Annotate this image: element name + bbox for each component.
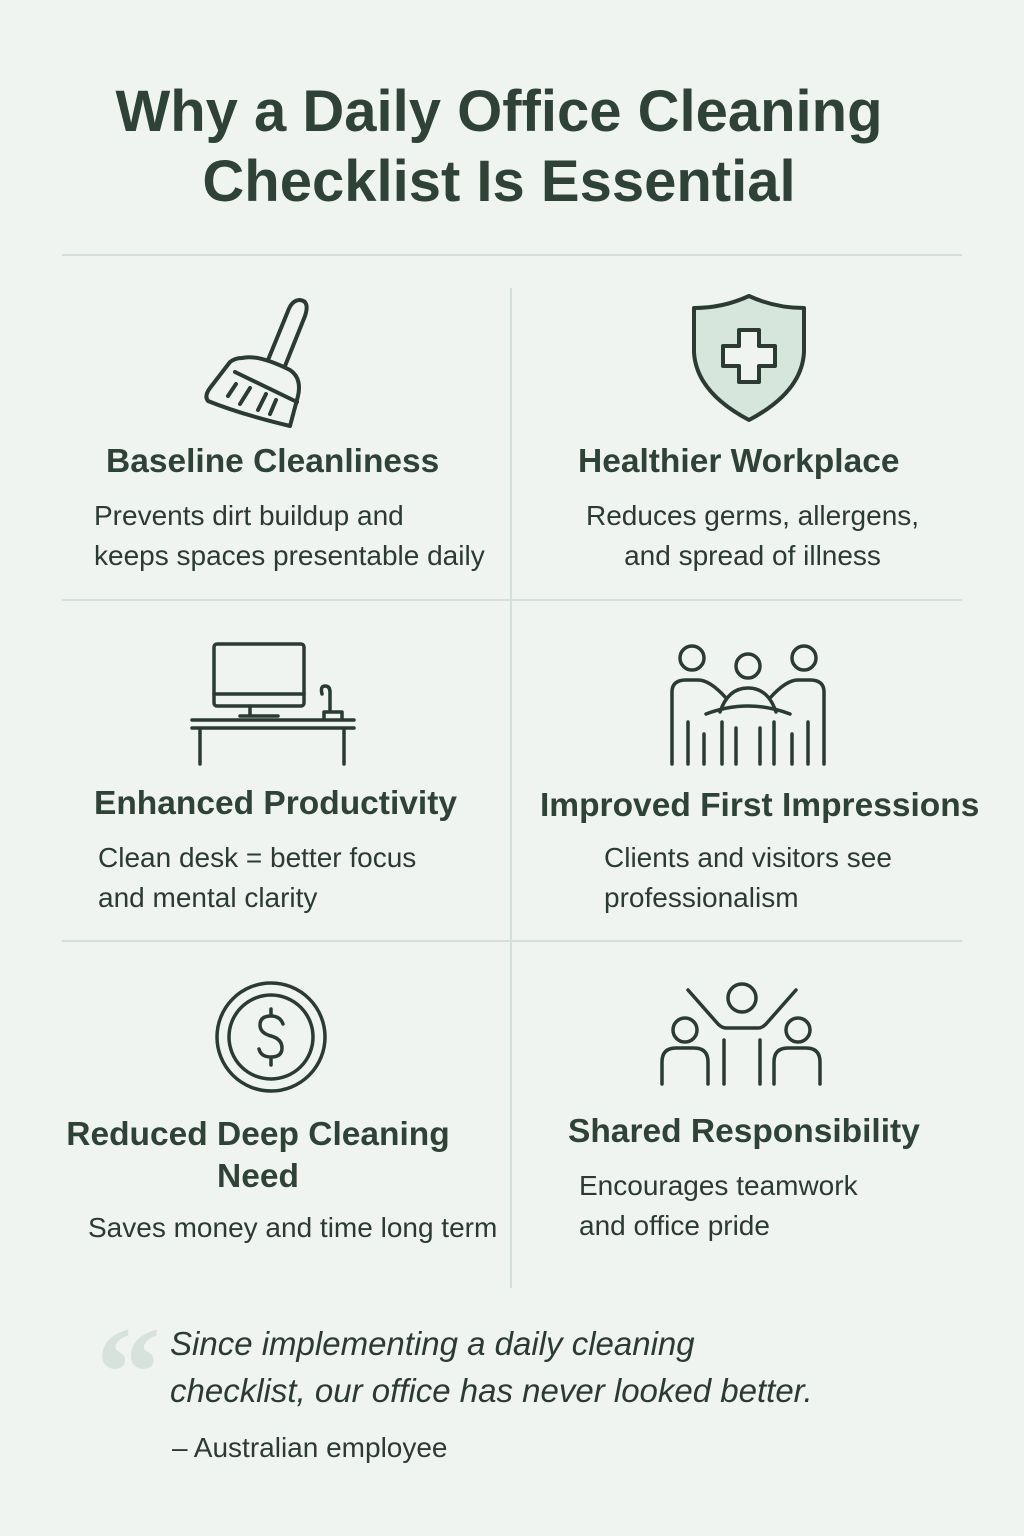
title: Why a Daily Office Cleaning	[115, 79, 883, 144]
text: and spread of illness	[624, 540, 881, 571]
icon: broom	[204, 298, 309, 428]
panel: enhanced productivity	[94, 642, 457, 913]
quote text	[170, 1325, 813, 1409]
text: Saves money and time long term	[88, 1212, 497, 1243]
text: Clients and visitors see	[604, 842, 892, 873]
panel: baseline cleanliness	[94, 298, 485, 571]
icon: quote mark: “	[96, 1301, 161, 1445]
text	[98, 842, 416, 913]
heading: Improved First Impressions	[540, 787, 979, 824]
quote text: checklist, our office has never looked better.	[170, 1372, 813, 1409]
panel: first impressions	[540, 644, 979, 913]
icon: desk computer	[190, 642, 356, 766]
text: Clean desk = better focus	[98, 842, 416, 873]
text: keeps spaces presentable daily	[94, 540, 485, 571]
heading: Healthier Workplace	[578, 443, 899, 480]
heading: Reduced Deep Cleaning Need	[66, 1116, 450, 1195]
text: professionalism	[604, 882, 799, 913]
icon: shield	[692, 294, 806, 422]
text: and office pride	[579, 1210, 770, 1241]
heading: Baseline Cleanliness	[106, 443, 439, 480]
icon: cheering people	[660, 982, 822, 1086]
text: Prevents dirt buildup and	[94, 500, 404, 531]
panel: healthier workplace	[578, 294, 919, 571]
text: Reduces germs, allergens,	[586, 500, 919, 531]
attribution: – Australian employee	[172, 1432, 448, 1463]
panel: reduced deep cleaning	[66, 981, 497, 1243]
text: Encourages teamwork	[579, 1170, 858, 1201]
heading: Shared Responsibility	[568, 1113, 920, 1150]
title	[115, 79, 883, 214]
heading: Enhanced Productivity	[94, 785, 457, 822]
text	[586, 500, 919, 571]
title: Checklist Is Essential	[202, 149, 796, 214]
quote	[96, 1301, 813, 1463]
panel: shared responsibility	[568, 982, 920, 1241]
text	[94, 500, 485, 571]
icon: people	[670, 644, 826, 766]
quote text: Since implementing a daily cleaning	[170, 1325, 695, 1362]
icon: coin	[215, 981, 327, 1093]
text: and mental clarity	[98, 882, 317, 913]
text	[579, 1170, 858, 1241]
text	[604, 842, 892, 913]
